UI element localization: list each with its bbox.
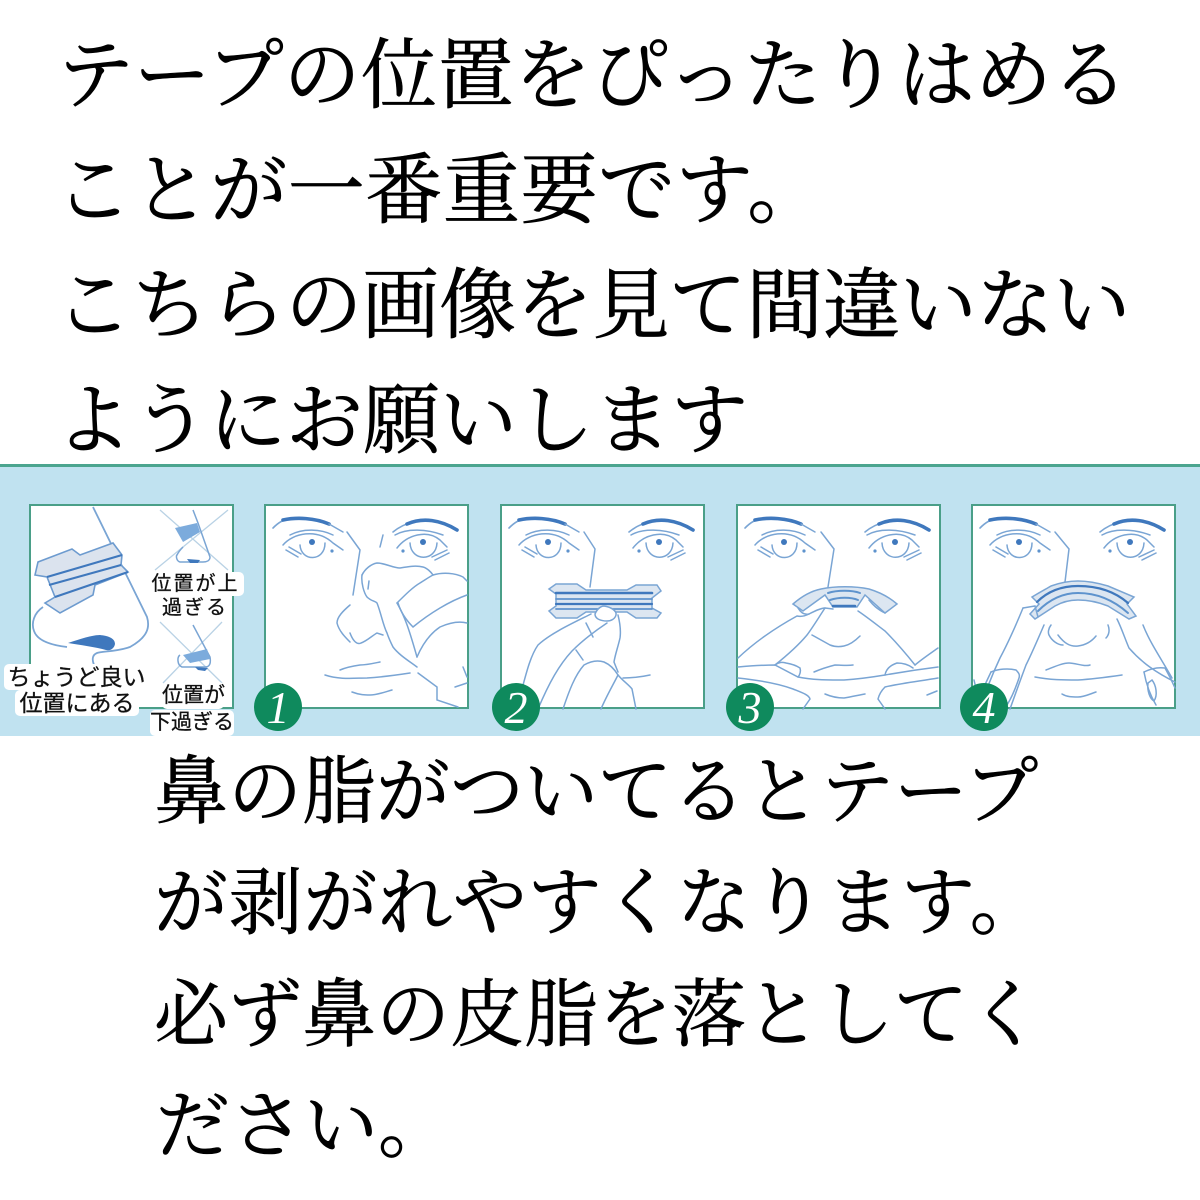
bottom instruction text: 必ず鼻の皮脂を落としてく <box>154 975 1042 1057</box>
band background <box>0 464 1200 736</box>
step badge 2 <box>492 682 540 733</box>
label: too high: 位置が上 <box>152 573 240 595</box>
top instruction text: テープの位置をぴったりはめる <box>57 33 1128 119</box>
panel: step 1 <box>265 505 468 708</box>
bottom instruction text: が剥がれやすくなります。 <box>154 863 1044 945</box>
top instruction text: ことが一番重要です。 <box>55 148 825 234</box>
step badge 3 <box>726 682 774 733</box>
label: correct position <box>4 664 146 716</box>
bottom instruction text: ださい。 <box>156 1086 452 1168</box>
step badge 2: 2 <box>504 682 528 733</box>
label: too low: 位置が <box>162 684 225 707</box>
label: too high: 過ぎる <box>162 597 228 619</box>
step badge 1 <box>254 682 302 733</box>
label: correct position: ちょうど良い <box>8 664 146 690</box>
panel: correct position diagram <box>30 505 233 708</box>
step badge 1: 1 <box>266 682 290 733</box>
bottom instruction text <box>154 752 1044 1168</box>
top instruction text: こちらの画像を見て間違いない <box>55 263 1130 349</box>
top instruction text: ようにお願いします <box>55 378 748 464</box>
label: correct position: 位置にある <box>20 690 134 716</box>
label: too low <box>150 682 234 736</box>
step badge 3: 3 <box>738 682 762 733</box>
bottom instruction text: 鼻の脂がついてるとテープ <box>154 752 1038 834</box>
step badge 4 <box>960 682 1008 733</box>
label: too high <box>152 572 244 619</box>
step badge 4: 4 <box>972 682 996 733</box>
panel: step 4 <box>972 505 1175 709</box>
top instruction text <box>55 33 1130 464</box>
label: too low: 下過ぎる <box>150 711 234 734</box>
panel: step 3 <box>737 505 940 709</box>
panel: step 2 <box>501 505 704 709</box>
